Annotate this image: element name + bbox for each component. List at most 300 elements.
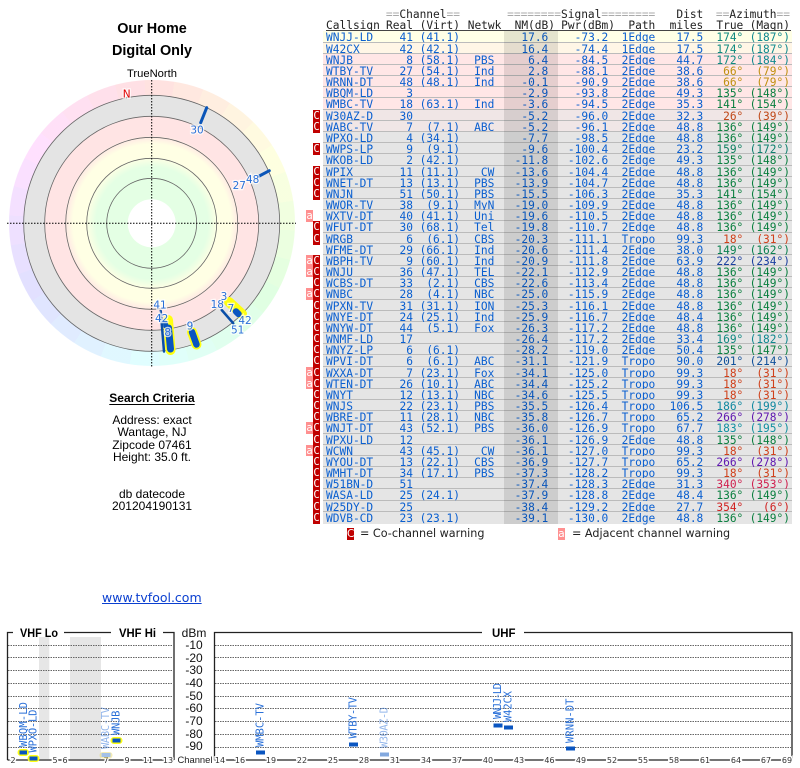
- row WNET-DT: 13: [400, 177, 413, 190]
- row WNYZ-LP: (147°): [750, 344, 790, 357]
- row W30AZ-D: W30AZ-D: [326, 110, 373, 123]
- row WNYT: Tropo: [622, 389, 655, 402]
- row WTBY-TV: 2.8: [528, 65, 548, 78]
- row WTEN-DT: [323, 378, 792, 389]
- warning badges: C: [313, 288, 320, 300]
- warning badges: [306, 110, 320, 524]
- table header: group titles: ========Signal========: [507, 8, 655, 21]
- row WPXN-TV: ION: [474, 300, 494, 313]
- warning badges: C: [313, 489, 320, 501]
- row WNYT: 18°: [723, 389, 743, 402]
- channel ticks: 37: [452, 756, 462, 765]
- row WBRE-DT: (28.1): [420, 411, 460, 424]
- channel ticks: 16: [235, 756, 245, 765]
- warning badges: C: [313, 300, 320, 312]
- row W51BN-D: 2Edge: [622, 478, 655, 491]
- legend: [347, 527, 730, 540]
- row WNYE-DT: (149°): [750, 311, 790, 324]
- row WFUT-DT: 2Edge: [622, 221, 655, 234]
- row WNJB: WNJB: [326, 54, 353, 67]
- row WXTV-DT: 2Edge: [622, 210, 655, 223]
- row WFUT-DT: [323, 221, 792, 233]
- warning badges: C: [313, 478, 320, 490]
- row WCWN: Tropo: [622, 445, 655, 458]
- channel ticks: 9: [124, 756, 130, 765]
- row WCWN: (31°): [756, 445, 790, 458]
- row WNYE-DT: [323, 311, 792, 322]
- row WNYZ-LP: 2Edge: [622, 344, 655, 357]
- legend: adjacent text: = Adjacent channel warning: [572, 527, 730, 540]
- row WPIX: WPIX: [326, 166, 353, 179]
- row WNYT: (13.1): [420, 389, 460, 402]
- row WNJJ-LD: 174°: [716, 31, 743, 44]
- row WNJU: [323, 266, 792, 277]
- row W51BN-D: 51: [400, 478, 413, 491]
- row WNJS: [323, 400, 792, 411]
- row W30AZ-D: (39°): [756, 110, 790, 123]
- row WNJN: 141°: [716, 188, 743, 201]
- channel ticks: 55: [638, 756, 648, 765]
- row WPXU-LD: [323, 434, 792, 445]
- row WNJN: 2Edge: [622, 188, 655, 201]
- row WNYT: -34.6: [515, 389, 548, 402]
- row WXXA-DT: 18°: [723, 367, 743, 380]
- row WPXO-LD: [323, 132, 792, 143]
- row WWOR-TV: MyN: [474, 199, 494, 212]
- row WPVI-DT: 6: [406, 355, 413, 368]
- row WTBY-TV: (54.1): [420, 65, 460, 78]
- row WTEN-DT: Tropo: [622, 378, 655, 391]
- table header: column titles: miles: [670, 19, 703, 32]
- row WBQM-LD: -93.8: [575, 87, 608, 100]
- row W30AZ-D: 30: [400, 110, 413, 123]
- row WNYT: WNYT: [326, 389, 353, 402]
- row WXTV-DT: 40: [400, 210, 413, 223]
- row WPXO-LD: 48.8: [676, 132, 703, 145]
- row WXXA-DT: (31°): [756, 367, 790, 380]
- row WFME-DT: 29: [400, 244, 413, 257]
- row WFUT-DT: 48.8: [676, 221, 703, 234]
- row WPVI-DT: Tropo: [622, 355, 655, 368]
- row WNJT-DT: -36.0: [515, 422, 548, 435]
- warning badges: C: [313, 445, 320, 457]
- row WWOR-TV: WWOR-TV: [326, 199, 373, 212]
- row WDVB-CD: 23: [400, 512, 413, 525]
- row WNYW-DT: (149°): [750, 322, 790, 335]
- row WPXN-TV: (149°): [750, 300, 790, 313]
- row WNYE-DT: (25.1): [420, 311, 460, 324]
- row WKOB-LD: 49.3: [676, 154, 703, 167]
- row WBRE-DT: 65.2: [676, 411, 703, 424]
- row WXXA-DT: -125.0: [568, 367, 608, 380]
- row WNBC: -115.9: [568, 288, 608, 301]
- row WPXU-LD: WPXU-LD: [326, 434, 373, 447]
- warning badges: a: [306, 378, 313, 390]
- row WNJB: 44.7: [676, 54, 703, 67]
- row WNYW-DT: [323, 322, 792, 333]
- row WASA-LD: WASA-LD: [326, 489, 373, 502]
- title: [112, 21, 192, 59]
- table header: column titles: Netwk: [468, 19, 501, 32]
- row WABC-TV: -96.1: [575, 121, 608, 134]
- row WMBC-TV: (154°): [750, 98, 790, 111]
- row WPXU-LD: -36.1: [515, 434, 548, 447]
- table header: group titles: ==Azimuth==: [716, 8, 790, 21]
- row WWPS-LP: WWPS-LP: [326, 143, 373, 156]
- row WNYW-DT: 2Edge: [622, 322, 655, 335]
- row WFUT-DT: 30: [400, 221, 413, 234]
- row WXTV-DT: -110.5: [568, 210, 608, 223]
- row WNJB: 8: [406, 54, 413, 67]
- row WMBC-TV: -3.6: [521, 98, 548, 111]
- row WNYE-DT: 48.4: [676, 311, 703, 324]
- row WCWN: WCWN: [326, 445, 353, 458]
- row WCBS-DT: 136°: [716, 277, 743, 290]
- row WNJT-DT: Tropo: [622, 422, 655, 435]
- row WMBC-TV: 141°: [716, 98, 743, 111]
- warning badges: a: [306, 445, 313, 457]
- radar chart: [7, 80, 296, 366]
- row W25DY-D: 354°: [716, 501, 743, 514]
- row WPXO-LD: (149°): [750, 132, 790, 145]
- row WNJB: -84.5: [575, 54, 608, 67]
- warning badges: C: [313, 188, 320, 200]
- row WXTV-DT: 48.8: [676, 210, 703, 223]
- row WNJB: (58.1): [420, 54, 460, 67]
- row WXTV-DT: -19.6: [515, 210, 548, 223]
- row WNET-DT: (13.1): [420, 177, 460, 190]
- row WABC-TV: WABC-TV: [326, 121, 373, 134]
- row WKOB-LD: 2Edge: [622, 154, 655, 167]
- row WRNN-DT: Ind: [474, 76, 494, 89]
- row WFME-DT: [323, 244, 792, 255]
- row WCBS-DT: 33: [400, 277, 413, 290]
- row WPXN-TV: 2Edge: [622, 300, 655, 313]
- row WNYZ-LP: -28.2: [515, 344, 548, 357]
- radar station labels: 41: [153, 300, 167, 312]
- row WKOB-LD: (148°): [750, 154, 790, 167]
- row WWPS-LP: (9.1): [426, 143, 460, 156]
- row WBPH-TV: 2Edge: [622, 255, 655, 268]
- channel ticks: 43: [514, 756, 524, 765]
- row WPVI-DT: ABC: [474, 355, 494, 368]
- row WMHT-DT: -37.3: [515, 467, 548, 480]
- row WPVI-DT: -31.1: [515, 355, 548, 368]
- row W51BN-D: -37.4: [515, 478, 548, 491]
- bar: ch 8: [168, 320, 170, 350]
- row WNJU: -112.9: [568, 266, 608, 279]
- row WNYW-DT: (5.1): [426, 322, 460, 335]
- row WWPS-LP: [323, 143, 792, 154]
- row WNJU: -22.1: [515, 266, 548, 279]
- channel ticks: 58: [669, 756, 679, 765]
- row WXXA-DT: [323, 367, 792, 378]
- row WNJB: PBS: [474, 54, 494, 67]
- row WNJS: 186°: [716, 400, 743, 413]
- row WFUT-DT: (149°): [750, 221, 790, 234]
- warning badges: C: [313, 333, 320, 345]
- row WNMF-LD: -117.2: [568, 333, 608, 346]
- radar station labels: 30: [190, 124, 204, 136]
- warning badges: a: [306, 422, 313, 434]
- radar: signal zones: [24, 95, 280, 351]
- row WPVI-DT: [323, 355, 792, 367]
- row WRNN-DT: (79°): [756, 76, 790, 89]
- bar: ch 48: [259, 171, 269, 176]
- row WMBC-TV: Ind: [474, 98, 494, 111]
- row WBQM-LD: (148°): [750, 87, 790, 100]
- row WPXU-LD: 135°: [716, 434, 743, 447]
- row W42CX: (42.1): [420, 43, 460, 56]
- row WCWN: 18°: [723, 445, 743, 458]
- row WDVB-CD: [323, 512, 792, 524]
- warning badges: C: [313, 411, 320, 423]
- row WNJT-DT: [323, 422, 792, 434]
- dBm scale: -80: [185, 727, 203, 741]
- row W51BN-D: 31.3: [676, 478, 703, 491]
- row WPIX: 11: [400, 166, 413, 179]
- row WNJS: -126.4: [568, 400, 608, 413]
- row WNYT: 99.3: [676, 389, 703, 402]
- row WNJT-DT: 67.7: [676, 422, 703, 435]
- row WMBC-TV: (63.1): [420, 98, 460, 111]
- radar station labels: 42: [238, 315, 252, 327]
- table header: column titles: [326, 19, 790, 32]
- station WBQM-LD: WBQM-LD: [18, 702, 30, 747]
- row WCBS-DT: -113.4: [568, 277, 608, 290]
- row WFME-DT: 38.0: [676, 244, 703, 257]
- warning badges: C: [313, 367, 320, 379]
- row WNJS: -35.5: [515, 400, 548, 413]
- row W30AZ-D: -5.2: [521, 110, 548, 123]
- row WNBC: 28: [400, 288, 413, 301]
- row WNJB: 6.4: [528, 54, 548, 67]
- row WNJT-DT: 183°: [716, 422, 743, 435]
- row WNJN: (50.1): [420, 188, 460, 201]
- row WNJS: 22: [400, 400, 413, 413]
- warning badges: C: [313, 400, 320, 412]
- row WNJU: 136°: [716, 266, 743, 279]
- row WPXN-TV: 136°: [716, 300, 743, 313]
- row WFUT-DT: (68.1): [420, 221, 460, 234]
- row WPXO-LD: 136°: [716, 132, 743, 145]
- row WWOR-TV: 48.8: [676, 199, 703, 212]
- row WTEN-DT: 18°: [723, 378, 743, 391]
- radar: azimuth colour ring: [9, 80, 295, 366]
- row WNMF-LD: 169°: [716, 333, 743, 346]
- radar station labels: 7: [228, 303, 234, 315]
- row W42CX: [323, 43, 792, 54]
- row WKOB-LD: 135°: [716, 154, 743, 167]
- row WFME-DT: Ind: [474, 244, 494, 257]
- row WABC-TV: (149°): [750, 121, 790, 134]
- legend: co-channel text: = Co-channel warning: [360, 527, 484, 540]
- row WYOU-DT: 266°: [716, 456, 743, 469]
- table header: column titles: Real: [386, 19, 413, 32]
- row WNYE-DT: 2Edge: [622, 311, 655, 324]
- row WMBC-TV: WMBC-TV: [326, 98, 373, 111]
- row WCWN: 99.3: [676, 445, 703, 458]
- station W42CX: W42CX: [502, 690, 514, 722]
- row W51BN-D: [323, 478, 792, 489]
- row WRNN-DT: WRNN-DT: [326, 76, 373, 89]
- radar station labels: 51: [231, 324, 244, 336]
- row WMBC-TV: 35.3: [676, 98, 703, 111]
- row WNBC: WNBC: [326, 288, 353, 301]
- row W25DY-D: 25: [400, 501, 413, 514]
- table header: group titles: ==Channel==: [386, 8, 460, 21]
- row WWPS-LP: (172°): [750, 143, 790, 156]
- row WBRE-DT: -126.7: [568, 411, 608, 424]
- dBm scale: -40: [185, 676, 203, 690]
- row WBRE-DT: 11: [400, 411, 413, 424]
- row WPXN-TV: 48.8: [676, 300, 703, 313]
- row WDVB-CD: 48.8: [676, 512, 703, 525]
- row WNJS: WNJS: [326, 400, 353, 413]
- warning badges: C: [313, 512, 320, 524]
- VHF panel frame: [8, 632, 174, 760]
- row WWOR-TV: 136°: [716, 199, 743, 212]
- row WNJN: -106.3: [568, 188, 608, 201]
- row WNJU: 2Edge: [622, 266, 655, 279]
- warning badges: C: [313, 166, 320, 178]
- VHF gray bands: [39, 637, 101, 759]
- station WNJJ-LD: WNJJ-LD: [492, 683, 504, 719]
- row WNJU: TEL: [474, 266, 494, 279]
- row WWOR-TV: -19.0: [515, 199, 548, 212]
- panel headings: VHF Hi: [119, 626, 156, 640]
- row WASA-LD: (24.1): [420, 489, 460, 502]
- row WXXA-DT: Tropo: [622, 367, 655, 380]
- row WTEN-DT: WTEN-DT: [326, 378, 373, 391]
- row WNYW-DT: 44: [400, 322, 413, 335]
- row WASA-LD: -128.8: [568, 489, 608, 502]
- row WBRE-DT: 266°: [716, 411, 743, 424]
- channel ticks: 69: [782, 756, 792, 765]
- row WPIX: [323, 166, 792, 177]
- channel ticks: 34: [421, 756, 431, 765]
- row WXXA-DT: -34.1: [515, 367, 548, 380]
- row WABC-TV: -5.2: [521, 121, 548, 134]
- row WYOU-DT: WYOU-DT: [326, 456, 373, 469]
- row WNJN: PBS: [474, 188, 494, 201]
- radar station labels: 27: [233, 180, 246, 192]
- row WNJT-DT: PBS: [474, 422, 494, 435]
- legend: adjacent swatch: a: [558, 528, 565, 540]
- channel ticks: [10, 756, 792, 765]
- row WNBC: 2Edge: [622, 288, 655, 301]
- row WKOB-LD: [323, 154, 792, 166]
- warning badges: C: [313, 311, 320, 323]
- row W42CX: W42CX: [326, 43, 360, 56]
- row WBPH-TV: WBPH-TV: [326, 255, 373, 268]
- row W51BN-D: (353°): [750, 478, 790, 491]
- row WBRE-DT: WBRE-DT: [326, 411, 373, 424]
- row WNYT: -125.5: [568, 389, 608, 402]
- row WRNN-DT: 48: [400, 76, 413, 89]
- row WWPS-LP: -9.6: [521, 143, 548, 156]
- row WWOR-TV: 38: [400, 199, 413, 212]
- UHF panel frame: [214, 632, 792, 760]
- warning badges: C: [313, 143, 320, 155]
- table header: column titles: True: [716, 19, 743, 32]
- row WWOR-TV: (149°): [750, 199, 790, 212]
- radar station labels: N: [123, 88, 131, 100]
- dBm scale: -30: [185, 663, 203, 677]
- bar: ch 9: [192, 332, 196, 344]
- row WWPS-LP: 159°: [716, 143, 743, 156]
- row W30AZ-D: -96.0: [575, 110, 608, 123]
- row WPVI-DT: WPVI-DT: [326, 355, 373, 368]
- radar station labels: 8: [164, 327, 171, 339]
- row WNYE-DT: WNYE-DT: [326, 311, 373, 324]
- row WBPH-TV: (234°): [750, 255, 790, 268]
- row WNYE-DT: Ind: [474, 311, 494, 324]
- row WPXN-TV: (31.1): [420, 300, 460, 313]
- bar: ch 3 and 7: [229, 302, 242, 314]
- search criteria details: [112, 413, 192, 464]
- row WFME-DT: -111.4: [568, 244, 608, 257]
- row WNET-DT: 2Edge: [622, 177, 655, 190]
- row WPIX: CW: [481, 166, 494, 179]
- row WNET-DT: PBS: [474, 177, 494, 190]
- row WNJJ-LD: 17.6: [521, 31, 548, 44]
- row WNJJ-LD: (41.1): [420, 31, 460, 44]
- table header: group titles: [386, 8, 790, 21]
- row WNBC: -25.0: [515, 288, 548, 301]
- row WPIX: 2Edge: [622, 166, 655, 179]
- row WTEN-DT: ABC: [474, 378, 494, 391]
- row WNYE-DT: 136°: [716, 311, 743, 324]
- search criteria heading: Search Criteria: [109, 391, 195, 405]
- row WNBC: (149°): [750, 288, 790, 301]
- warning badges: C: [313, 110, 320, 122]
- row WPXU-LD: 12: [400, 434, 413, 447]
- row WCWN: -127.0: [568, 445, 608, 458]
- row WNYZ-LP: 135°: [716, 344, 743, 357]
- row WFUT-DT: Tel: [474, 221, 494, 234]
- table header: group titles: Dist: [676, 8, 703, 21]
- row WRNN-DT: -90.9: [575, 76, 608, 89]
- row WYOU-DT: [323, 456, 792, 467]
- row WRGB: (6.1): [426, 233, 460, 246]
- row WNET-DT: WNET-DT: [326, 177, 373, 190]
- row W51BN-D: W51BN-D: [326, 478, 373, 491]
- row WBRE-DT: -35.8: [515, 411, 548, 424]
- row WXTV-DT: [323, 210, 792, 221]
- row W25DY-D: (6°): [763, 501, 790, 514]
- channel ticks: 11: [143, 756, 153, 765]
- row WNJN: WNJN: [326, 188, 353, 201]
- row WFUT-DT: 136°: [716, 221, 743, 234]
- row WRNN-DT: (48.1): [420, 76, 460, 89]
- row WNET-DT: -104.7: [568, 177, 608, 190]
- row WNJT-DT: (52.1): [420, 422, 460, 435]
- row WDVB-CD: -39.1: [515, 512, 548, 525]
- row WFME-DT: WFME-DT: [326, 244, 373, 257]
- bar: ch 41: [161, 311, 164, 352]
- row WBQM-LD: 3: [406, 87, 413, 100]
- dBm scale: -20: [185, 651, 203, 665]
- panel headings: UHF: [492, 626, 516, 640]
- row WPIX: (149°): [750, 166, 790, 179]
- row WNJS: PBS: [474, 400, 494, 413]
- row WDVB-CD: 2Edge: [622, 512, 655, 525]
- row WBPH-TV: -20.9: [515, 255, 548, 268]
- radar station labels: 42: [155, 313, 168, 325]
- dBm scale: -60: [185, 701, 203, 715]
- row WNYT: [323, 389, 792, 400]
